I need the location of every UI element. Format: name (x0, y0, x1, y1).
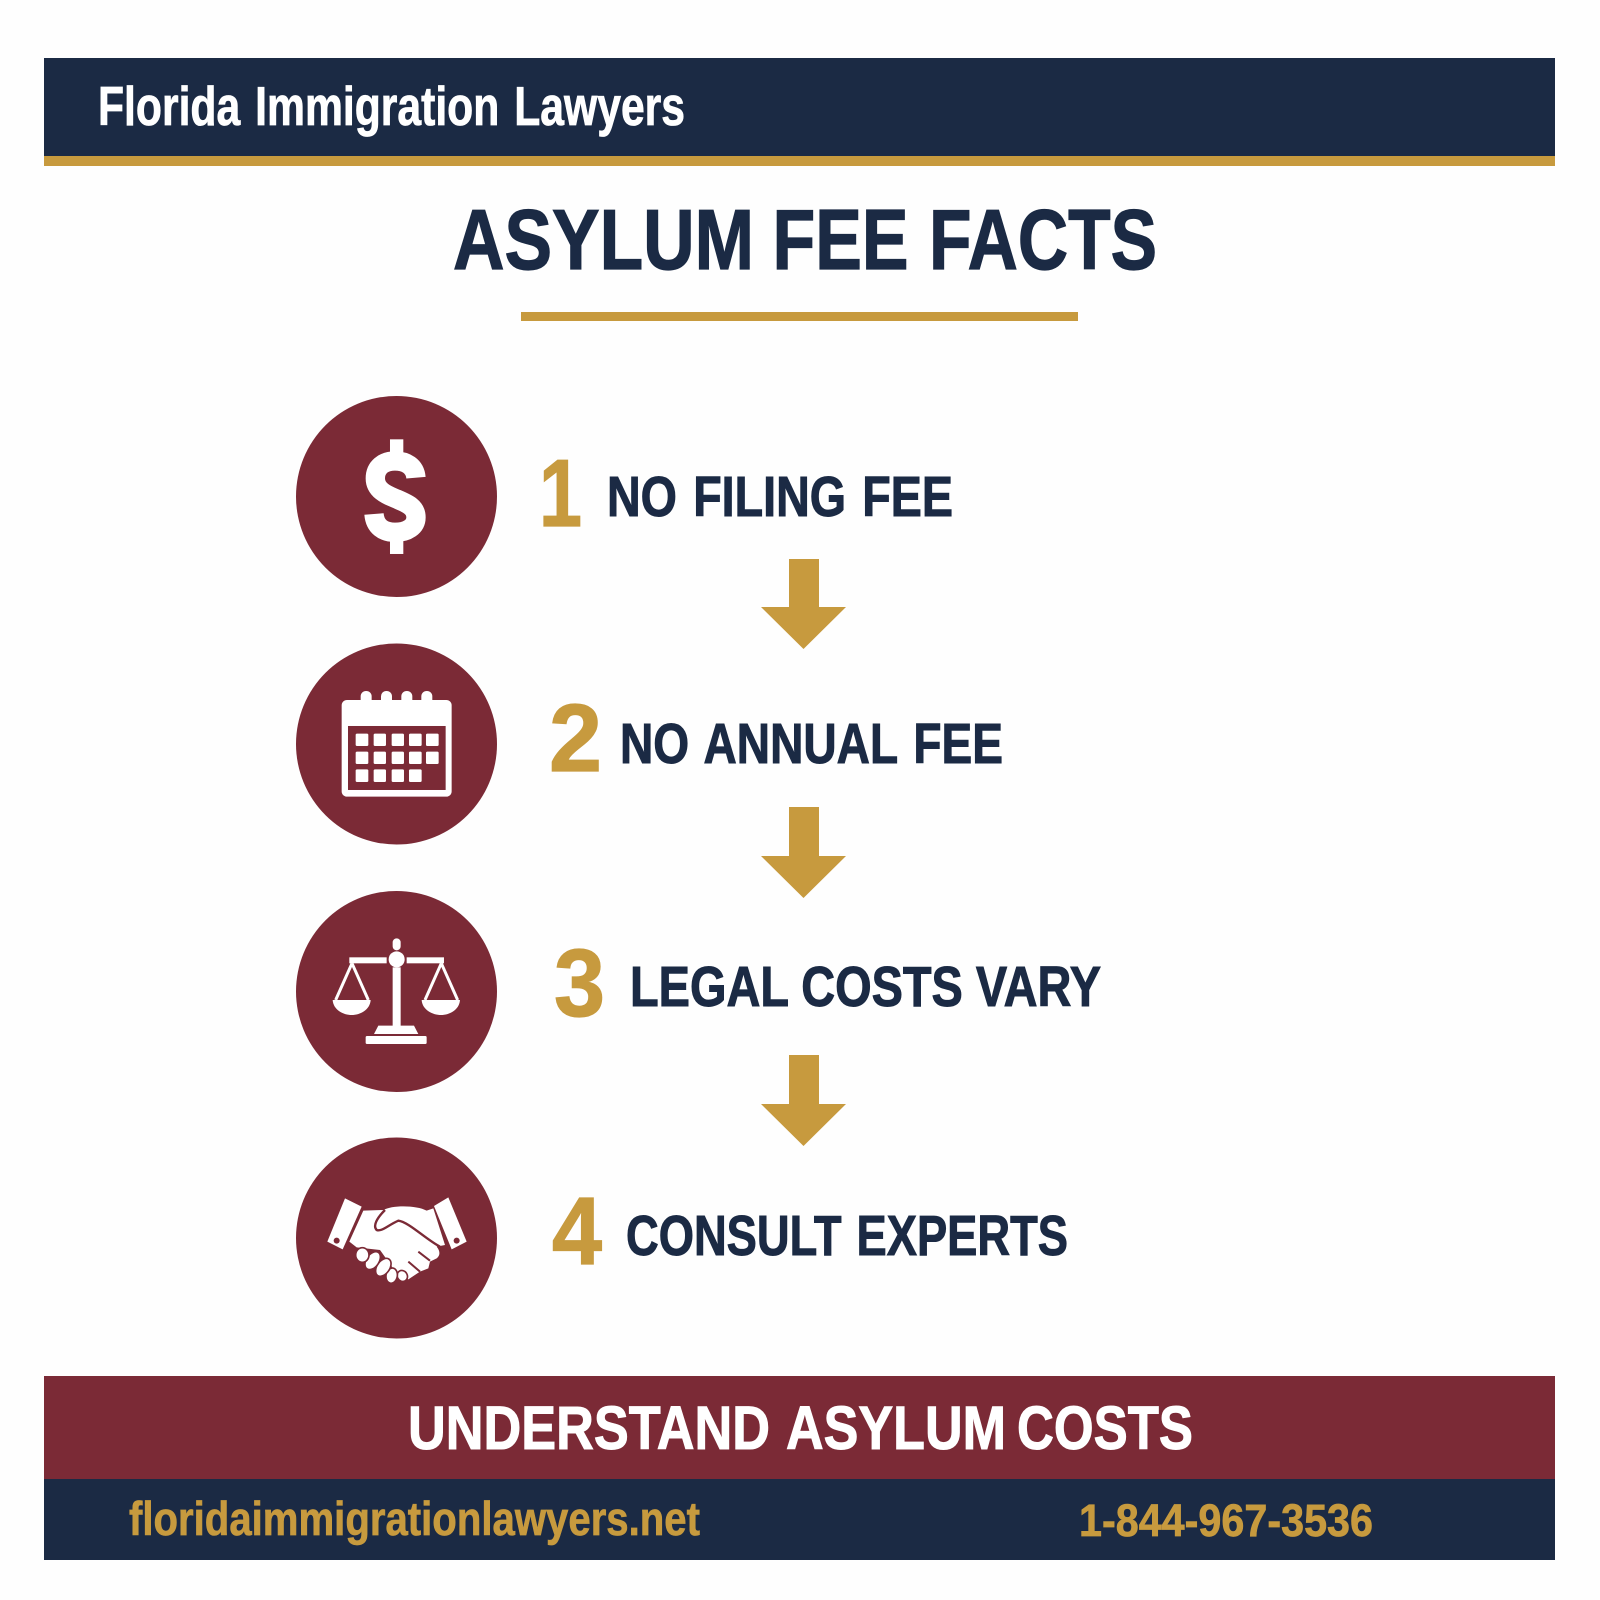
title (453, 193, 1157, 288)
header firm name: Florida Immigration Lawyers (98, 75, 685, 137)
icon: handshake (296, 1138, 497, 1338)
number 1: 1 (539, 440, 582, 547)
call to action band (44, 1376, 1555, 1479)
number 2: 2 (549, 685, 602, 792)
icon: dollar sign (296, 396, 497, 597)
title: FEE (772, 193, 908, 288)
arrow 3 (761, 1055, 846, 1146)
label: no filing fee: NO FILING FEE (607, 465, 953, 529)
step 3 (296, 891, 1101, 1092)
title: ASYLUM (453, 193, 754, 288)
label: no annual fee: NO ANNUAL FEE (620, 712, 1003, 776)
step 2 (296, 644, 1003, 844)
number 4: 4 (552, 1178, 602, 1285)
call to action text: ASYLUM (786, 1394, 1006, 1462)
icon: scales of justice (296, 891, 497, 1092)
title underline (521, 312, 1078, 321)
phone number: 1-844-967-3536 (1079, 1495, 1373, 1546)
call to action text (408, 1394, 1193, 1462)
arrow 2 (761, 807, 846, 898)
footer contact band (44, 1479, 1555, 1560)
header banner (44, 58, 1555, 166)
website: floridaimmigrationlawyers.net (129, 1492, 700, 1545)
step 1 (296, 396, 953, 597)
call to action text: UNDERSTAND (408, 1394, 770, 1462)
label: legal costs vary: LEGAL COSTS VARY (630, 955, 1101, 1019)
number 3: 3 (554, 930, 605, 1037)
call to action text: COSTS (1017, 1394, 1193, 1462)
arrow 1 (761, 559, 846, 649)
icon: calendar (296, 644, 497, 844)
step 4 (296, 1138, 1068, 1338)
label: consult experts: CONSULT EXPERTS (626, 1204, 1068, 1268)
title: FACTS (929, 193, 1157, 288)
